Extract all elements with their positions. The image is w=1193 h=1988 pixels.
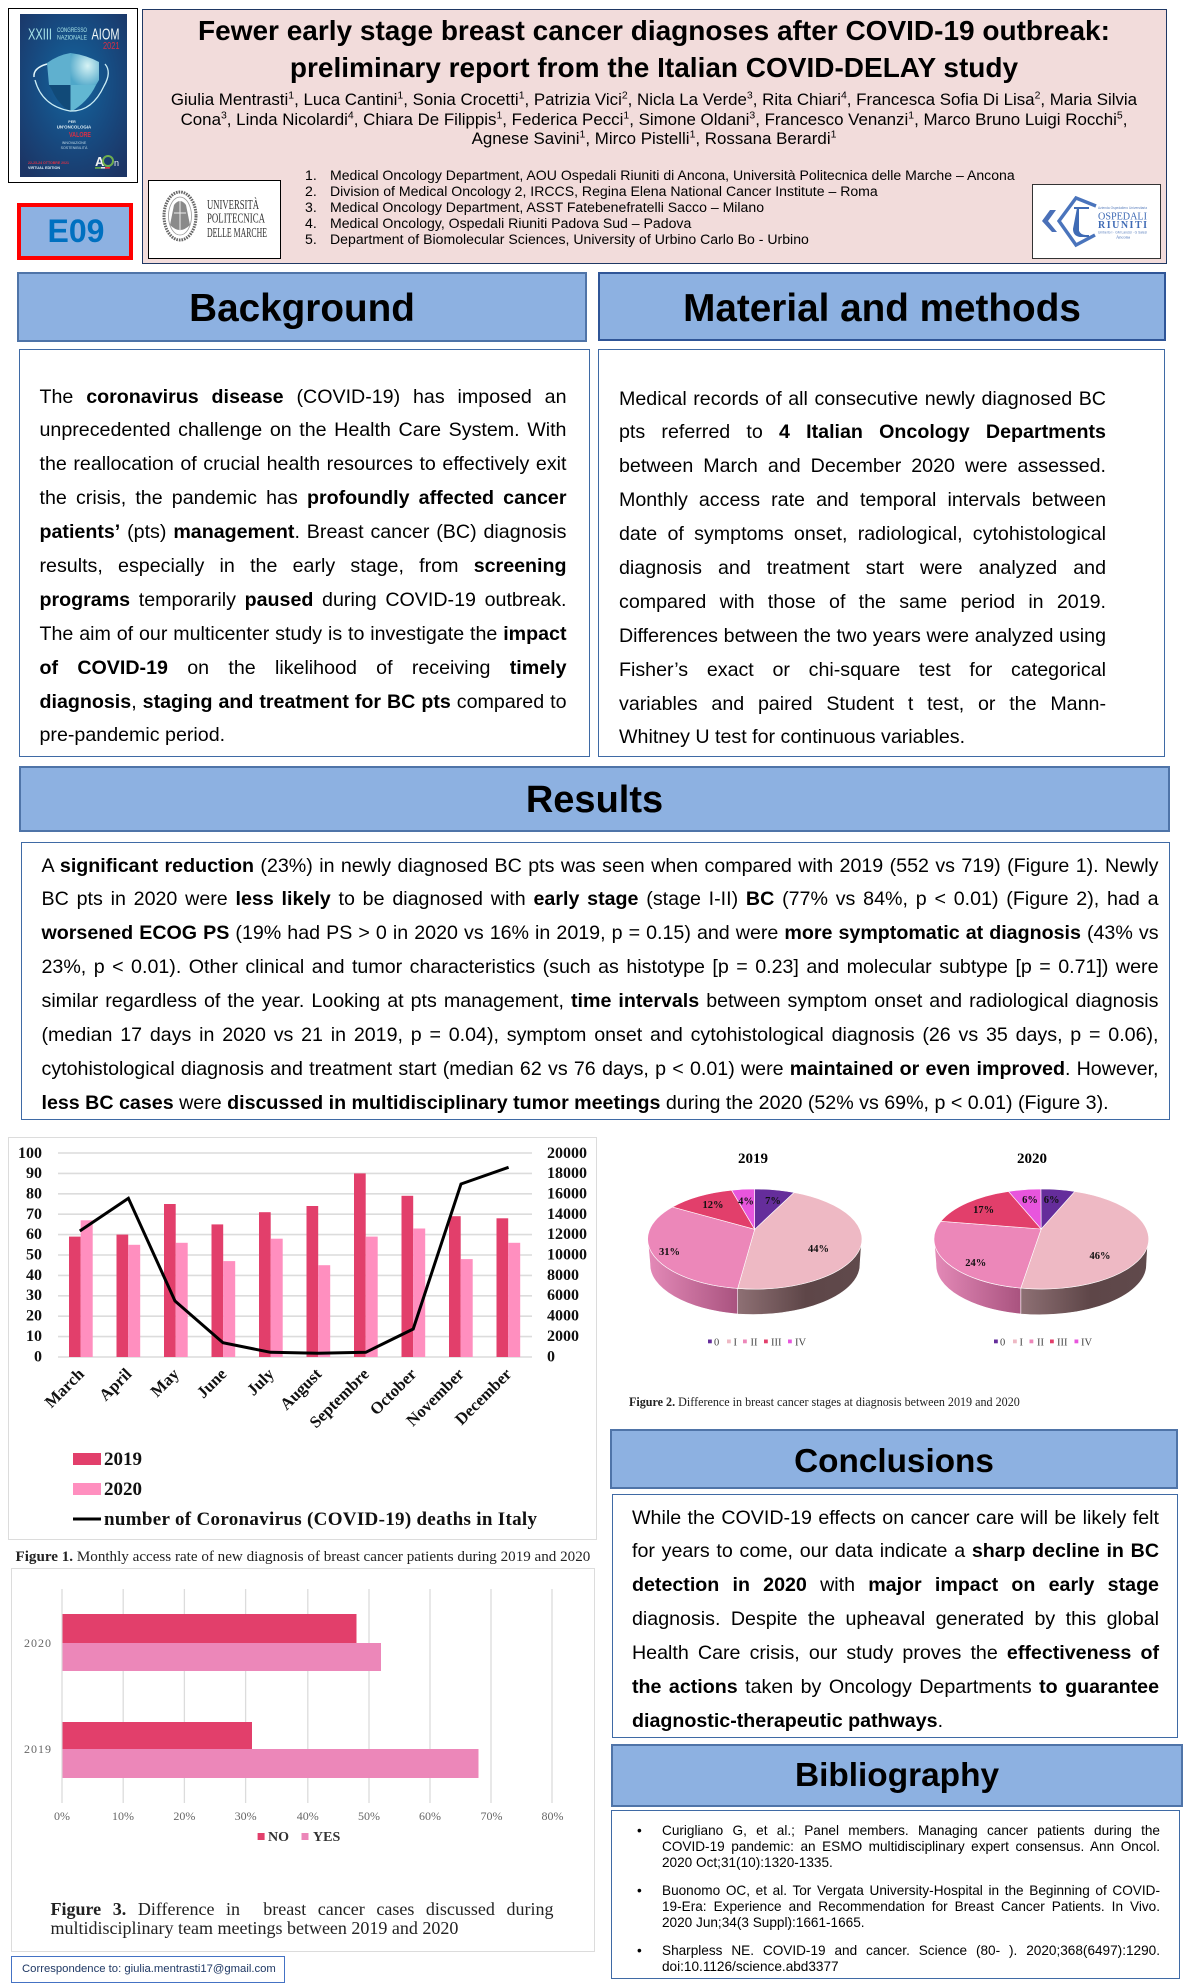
chart: monthly access bars and deaths line: May — [147, 1364, 183, 1401]
chart: multidisciplinary meetings bars: 70% — [480, 1809, 502, 1823]
background paragraph: patients’ (pts) management. Breast cancer (BC) diagnosis — [40, 521, 566, 543]
panel: figure 3 chart — [11, 1568, 595, 1952]
poster code E09 — [17, 203, 133, 260]
chart: monthly access bars and deaths line: December — [451, 1364, 516, 1429]
affiliations: 5. — [305, 231, 317, 247]
methods paragraph — [619, 388, 1106, 748]
background paragraph: of COVID-19 on the likelihood of receiving timely — [40, 657, 567, 679]
chart: monthly access bars and deaths line: number of Coronavirus (COVID-19) deaths in Italy — [104, 1509, 538, 1530]
background paragraph: The coronavirus disease (COVID-19) has imposed an — [40, 386, 566, 408]
results paragraph: A significant reduction (23%) in newly diagnosed BC pts was seen when compared with 2019 (552 vs 719) (Figure 1). Newly — [42, 854, 1158, 876]
icon: congress cover artwork: NAZIONALE — [56, 35, 86, 41]
background paragraph: diagnosis, staging and treatment for BC pts compared to — [40, 691, 566, 713]
authors: Agnese Savini1, Mirco Pistelli1, Rossana Berardi1 — [472, 129, 836, 148]
panel: bibliography list — [611, 1810, 1180, 1979]
panel: methods text — [598, 349, 1165, 757]
reference 3: Sharpless NE. COVID-19 and cancer. Science (80- ). 2020;368(6497):1290. — [662, 1943, 1160, 1958]
chart: pie 2019: II — [750, 1338, 758, 1348]
affiliations: Medical Oncology Department, AOU Ospedali Riuniti di Ancona, Università Politecnica delle Marche – Ancona — [330, 167, 1015, 183]
icon: congress cover artwork: CONGRESSO — [56, 28, 87, 34]
conclusions paragraph — [632, 1506, 1160, 1732]
chart: multidisciplinary meetings bars: 10% — [112, 1809, 134, 1823]
icon: congress cover artwork: SOSTENIBILITÀ — [60, 146, 87, 150]
correspondence note: Correspondence to: giulia.mentrasti17@gmail.com — [22, 1963, 276, 1975]
chart: pie 2020: 0 — [1000, 1338, 1005, 1348]
icon: congress cover artwork — [20, 14, 127, 177]
chart: multidisciplinary meetings bars: 2019 — [24, 1742, 51, 1756]
results paragraph: 23%, p < 0.01). Other clinical and tumor characteristics (such as histotype [p = 0.23] and molecular subtype [p = 0.71]) were — [42, 956, 1158, 978]
caption: figure 3 — [50, 1899, 554, 1938]
chart: pie 2020: 24% — [965, 1258, 986, 1269]
chart: multidisciplinary meetings bars: 40% — [297, 1809, 319, 1823]
authors: Cona3, Linda Nicolardi4, Chiara De Filippis1, Federica Pecci1, Simone Oldani3, Francesco Venanzi1, Marco Bruno Luigi Rocchi5, — [181, 110, 1127, 129]
results paragraph: BC pts in 2020 were less likely to be diagnosed with early stage (stage I-II) BC (77% vs 84%, p < 0.01) (Figure 2), had a — [42, 888, 1159, 910]
panel: title block — [142, 9, 1167, 264]
conclusions paragraph: the actions taken by Oncology Departments to guarantee — [632, 1676, 1159, 1698]
affiliations: Division of Medical Oncology 2, IRCCS, Regina Elena National Cancer Institute – Roma — [330, 183, 878, 199]
chart: monthly access bars and deaths line: 0 — [547, 1348, 555, 1366]
chart: monthly access bars and deaths line: July — [243, 1364, 278, 1399]
caption: figure 1: Figure 1. Monthly access rate of new diagnosis of breast cancer patients during 2019 and 2020 — [16, 1549, 590, 1565]
title: Fewer early stage breast cancer diagnoses after COVID-19 outbreak: — [198, 15, 1110, 46]
icon: congress cover artwork: UN'ONCOLOGIA — [56, 124, 92, 129]
methods paragraph: between March and December 2020 were assessed. — [619, 455, 1106, 477]
background paragraph: the reallocation of crucial health resources to effectively exit — [40, 453, 566, 475]
correspondence note — [11, 1956, 285, 1983]
chart: multidisciplinary meetings bars: 30% — [235, 1809, 257, 1823]
affiliations: Department of Biomolecular Sciences, University of Urbino Carlo Bo - Urbino — [330, 231, 809, 247]
chart: multidisciplinary meetings bars: NO — [268, 1830, 289, 1845]
icon: congress cover artwork: VALORE — [68, 132, 91, 138]
title — [198, 15, 1110, 83]
chart: monthly access bars and deaths line: August — [276, 1364, 326, 1414]
conclusions paragraph: for years to come, our data indicate a sharp decline in BC — [632, 1540, 1159, 1562]
background paragraph: results, especially in the early stage, from screening — [40, 555, 566, 577]
chart: monthly access bars and deaths line: 4000 — [547, 1308, 579, 1324]
results paragraph — [42, 854, 1159, 1114]
icon: hospital logo: RIUNITI — [1098, 220, 1147, 231]
reference 1: Curigliano G, et al.; Panel members. Managing cancer patients during the — [662, 1823, 1160, 1838]
conclusions paragraph: diagnosis. Despite the upheaval generated by this global — [632, 1608, 1159, 1630]
chart: monthly access bars and deaths line: 20000 — [547, 1145, 587, 1162]
chart: monthly access bars and deaths line: 100 — [18, 1145, 42, 1162]
panel: bibliography list: • — [637, 1823, 642, 1838]
chart: monthly access bars and deaths line: 70 — [26, 1206, 42, 1223]
chart: pie 2019: 0 — [714, 1338, 719, 1348]
reference 1: 2020 Oct;31(10):1320-1335. — [662, 1855, 833, 1870]
authors — [171, 90, 1138, 148]
chart: multidisciplinary meetings bars: 2020 — [24, 1636, 51, 1650]
results paragraph: (median 17 days in 2020 vs 21 in 2019, p = 0.04), symptom onset and cytohistological diagnosis (26 vs 35 days, p = 0.06), — [42, 1024, 1158, 1046]
chart: monthly access bars and deaths line: 2000 — [547, 1328, 579, 1345]
chart: pie 2019: I — [734, 1338, 738, 1348]
heading: Background — [17, 272, 587, 342]
authors: Giulia Mentrasti1, Luca Cantini1, Sonia Crocetti1, Patrizia Vici2, Nicla La Verde3, Rita Chiari4, Francesca Sofia Di Lisa2, Maria Silvia — [171, 90, 1137, 109]
panel: conclusions text — [612, 1494, 1178, 1738]
background paragraph: unprecedented challenge on the Health Care System. With — [40, 419, 566, 441]
icon: congress cover artwork: n — [114, 158, 119, 168]
icon: university logo: POLITECNICA — [207, 212, 266, 226]
chart: monthly access bars and deaths line: June — [193, 1364, 230, 1402]
methods paragraph: variables and paired Student t test, or the Mann- — [619, 693, 1106, 715]
reference 3: doi:10.1126/science.abd3377 — [662, 1959, 839, 1974]
congress cover box — [8, 8, 138, 183]
results paragraph: cytohistological diagnosis and treatment start (median 62 vs 76 days, p < 0.01) were maintained or even improved. However, — [42, 1058, 1158, 1080]
methods paragraph: diagnosis and treatment start were analyzed and — [619, 557, 1106, 579]
chart: pie 2020: 2020 — [1017, 1151, 1047, 1167]
panel: bibliography list: • — [637, 1883, 642, 1898]
chart: multidisciplinary meetings bars: YES — [313, 1830, 340, 1845]
title: preliminary report from the Italian COVID-DELAY study — [290, 52, 1018, 83]
methods paragraph: compared with those of the same period in 2019. — [619, 591, 1106, 613]
heading: Background: Background — [189, 287, 415, 330]
chart: monthly access bars and deaths line: November — [402, 1364, 468, 1430]
icon: hospital logo: Azienda Ospedaliero Universitaria — [1098, 206, 1147, 210]
chart: monthly access bars and deaths line: 90 — [26, 1165, 42, 1182]
reference 1 — [637, 1823, 1160, 1870]
heading: Results: Results — [526, 778, 663, 820]
heading: Conclusions — [610, 1429, 1178, 1489]
background paragraph: programs temporarily paused during COVID-19 outbreak. — [40, 589, 566, 611]
icon: congress cover artwork: PER — [68, 120, 76, 124]
chart: pie 2019: 31% — [659, 1247, 680, 1258]
poster code E09: E09 — [48, 212, 104, 248]
heading: Bibliography — [611, 1744, 1183, 1807]
icon: congress cover artwork: VIRTUAL EDITION — [28, 164, 60, 170]
affiliations: 4. — [305, 215, 317, 231]
chart: monthly access bars and deaths line: 10 — [26, 1328, 42, 1345]
results paragraph: similar regardless of the year. Looking at pts management, time intervals between symptom onset and radiological diagnosis — [42, 990, 1158, 1012]
reference 2 — [637, 1883, 1160, 1930]
heading: Material and methods — [598, 272, 1166, 341]
chart: pie 2019: 12% — [702, 1200, 724, 1211]
chart: multidisciplinary meetings bars: 80% — [542, 1809, 564, 1823]
affiliations: 3. — [305, 199, 317, 215]
chart: monthly access bars and deaths line: April — [95, 1364, 136, 1405]
icon: hospital logo: Umberto I · GM Lancisi · G Salesi — [1098, 230, 1147, 234]
icon: congress cover artwork: AIOM — [91, 26, 119, 43]
chart: pie 2020: 6% — [1022, 1195, 1038, 1206]
methods paragraph: Monthly access rate and temporal intervals between — [619, 489, 1106, 511]
chart: monthly access bars and deaths line: 40 — [26, 1267, 42, 1284]
background paragraph — [40, 386, 567, 746]
icon: congress cover artwork: INNOVAZIONE — [61, 140, 86, 144]
chart: pie 2019: IV — [795, 1338, 806, 1348]
chart: monthly access bars and deaths line: 18000 — [547, 1165, 587, 1182]
chart: pie 2019: III — [771, 1338, 782, 1348]
icon: congress cover artwork: 2021 — [102, 40, 119, 52]
icon: congress cover artwork: A — [94, 154, 104, 168]
icon: congress cover artwork: XXIII — [28, 26, 52, 43]
heading: Results — [19, 766, 1170, 832]
affiliations — [305, 167, 1015, 247]
chart: pie 2019: 44% — [808, 1244, 829, 1255]
chart: pie 2019: 2019 — [738, 1151, 768, 1167]
reference 1: COVID-19 pandemic: an ESMO multidisciplinary expert consensus. Ann Oncol. — [662, 1839, 1160, 1854]
reference 2: 19-Era: Experience and Recommendation for Breast Cancer Patients. In Vivo. — [662, 1899, 1160, 1914]
background paragraph: the crisis, the pandemic has profoundly affected cancer — [40, 487, 566, 509]
chart: monthly access bars and deaths line: 2019 — [104, 1449, 142, 1470]
chart: pie 2020: I — [1020, 1338, 1024, 1348]
reference 2: 2020 Jun;34(3 Suppl):1661-1665. — [662, 1915, 865, 1930]
chart: multidisciplinary meetings bars: 60% — [419, 1809, 441, 1823]
icon: university logo: UNIVERSITÀ — [207, 196, 260, 213]
methods paragraph: Fisher’s exact or chi-square test for categorical — [619, 659, 1106, 681]
conclusions paragraph: While the COVID-19 effects on cancer care will be likely felt — [632, 1506, 1159, 1528]
panel: figure 1 chart — [8, 1137, 597, 1540]
methods paragraph: date of symptoms onset, radiological, cytohistological — [619, 523, 1106, 545]
heading: Bibliography: Bibliography — [795, 1756, 999, 1794]
chart: pie 2020: 6% — [1044, 1195, 1059, 1206]
icon: hospital logo — [1032, 184, 1161, 259]
chart: monthly access bars and deaths line: October — [366, 1364, 421, 1419]
affiliations: 2. — [305, 183, 317, 199]
chart: monthly access bars and deaths line: Septembre — [306, 1364, 373, 1432]
panel: results text — [21, 842, 1170, 1120]
chart: pie 2020: II — [1037, 1338, 1044, 1348]
icon: congress cover artwork: 22-23-24 OTTOBRE 2021 — [28, 160, 69, 164]
chart: monthly access bars and deaths line: 10000 — [547, 1246, 587, 1264]
heading: Material and methods: Material and methods — [683, 286, 1081, 330]
chart: monthly access bars and deaths line: 8000 — [547, 1267, 579, 1284]
chart: monthly access bars and deaths line: 16000 — [547, 1186, 587, 1202]
chart: monthly access bars and deaths line: 2020 — [104, 1479, 142, 1500]
chart: monthly access bars and deaths line: 0 — [34, 1348, 42, 1366]
reference 2: Buonomo OC, et al. Tor Vergata University-Hospital in the Beginning of COVID- — [662, 1883, 1160, 1898]
methods paragraph: Whitney U test for continuous variables. — [619, 726, 965, 748]
chart: monthly access bars and deaths line: 30 — [26, 1287, 42, 1304]
chart: monthly access bars and deaths line: 80 — [26, 1186, 42, 1202]
methods paragraph: Differences between the two years were analyzed using — [619, 625, 1106, 647]
results paragraph: worsened ECOG PS (19% had PS > 0 in 2020 vs 16% in 2019, p = 0.15) and were more symptomatic at diagnosis (43% vs — [42, 922, 1159, 944]
methods paragraph: pts referred to 4 Italian Oncology Departments — [619, 421, 1106, 443]
chart: monthly access bars and deaths line: 12000 — [547, 1226, 587, 1243]
chart: pie 2020: III — [1057, 1338, 1068, 1348]
results paragraph: less BC cases were discussed in multidisciplinary tumor meetings during the 2020 (52% vs 69%, p < 0.01) (Figure 3). — [42, 1092, 1109, 1114]
caption: figure 2: Figure 2. Difference in breast cancer stages at diagnosis between 2019 and 2020 — [629, 1395, 1020, 1409]
methods paragraph: Medical records of all consecutive newly diagnosed BC — [619, 388, 1106, 410]
background paragraph: The aim of our multicenter study is to investigate the impact — [40, 623, 566, 645]
chart: monthly access bars and deaths line: March — [41, 1364, 88, 1412]
panel: bibliography list: • — [637, 1943, 642, 1958]
heading: Conclusions: Conclusions — [794, 1442, 994, 1480]
affiliations: 1. — [305, 167, 317, 183]
panel: background text — [19, 349, 590, 757]
conclusions paragraph: diagnostic-therapeutic pathways. — [632, 1710, 943, 1732]
chart: multidisciplinary meetings bars: 20% — [173, 1809, 195, 1823]
affiliations: Medical Oncology Department, ASST Fatebenefratelli Sacco – Milano — [330, 199, 764, 215]
icon: hospital logo: Ancona — [1116, 234, 1130, 240]
caption: figure 3: multidisciplinary team meetings between 2019 and 2020 — [50, 1918, 458, 1938]
chart: multidisciplinary meetings bars: 0% — [54, 1809, 70, 1823]
reference 3 — [637, 1943, 1160, 1974]
conclusions paragraph: Health Care crisis, our study proves the effectiveness of — [632, 1642, 1159, 1664]
chart: monthly access bars and deaths line: 6000 — [547, 1287, 579, 1304]
affiliations: Medical Oncology, Ospedali Riuniti Padova Sud – Padova — [330, 215, 691, 231]
chart: monthly access bars and deaths line: 60 — [26, 1226, 42, 1243]
chart: monthly access bars and deaths line: 14000 — [547, 1206, 587, 1223]
icon: hospital logo: OSPEDALI — [1098, 212, 1147, 222]
chart: monthly access bars and deaths line: 50 — [26, 1246, 42, 1264]
caption: figure 3: Figure 3. Difference in breast cancer cases discussed during — [50, 1899, 554, 1919]
chart: pie 2020: IV — [1081, 1338, 1092, 1348]
background paragraph: pre-pandemic period. — [40, 724, 225, 746]
chart: multidisciplinary meetings bars: 50% — [358, 1809, 380, 1823]
icon: university logo — [148, 180, 281, 259]
chart: pie 2020: 46% — [1090, 1251, 1110, 1262]
chart: pie 2020: 17% — [973, 1205, 994, 1216]
chart: pie 2019: 4% — [738, 1196, 754, 1208]
chart: monthly access bars and deaths line: 20 — [26, 1308, 42, 1324]
conclusions paragraph: detection in 2020 with major impact on early stage — [632, 1574, 1159, 1596]
chart: pie 2019: 7% — [765, 1196, 781, 1207]
icon: university logo: DELLE MARCHE — [207, 226, 267, 241]
